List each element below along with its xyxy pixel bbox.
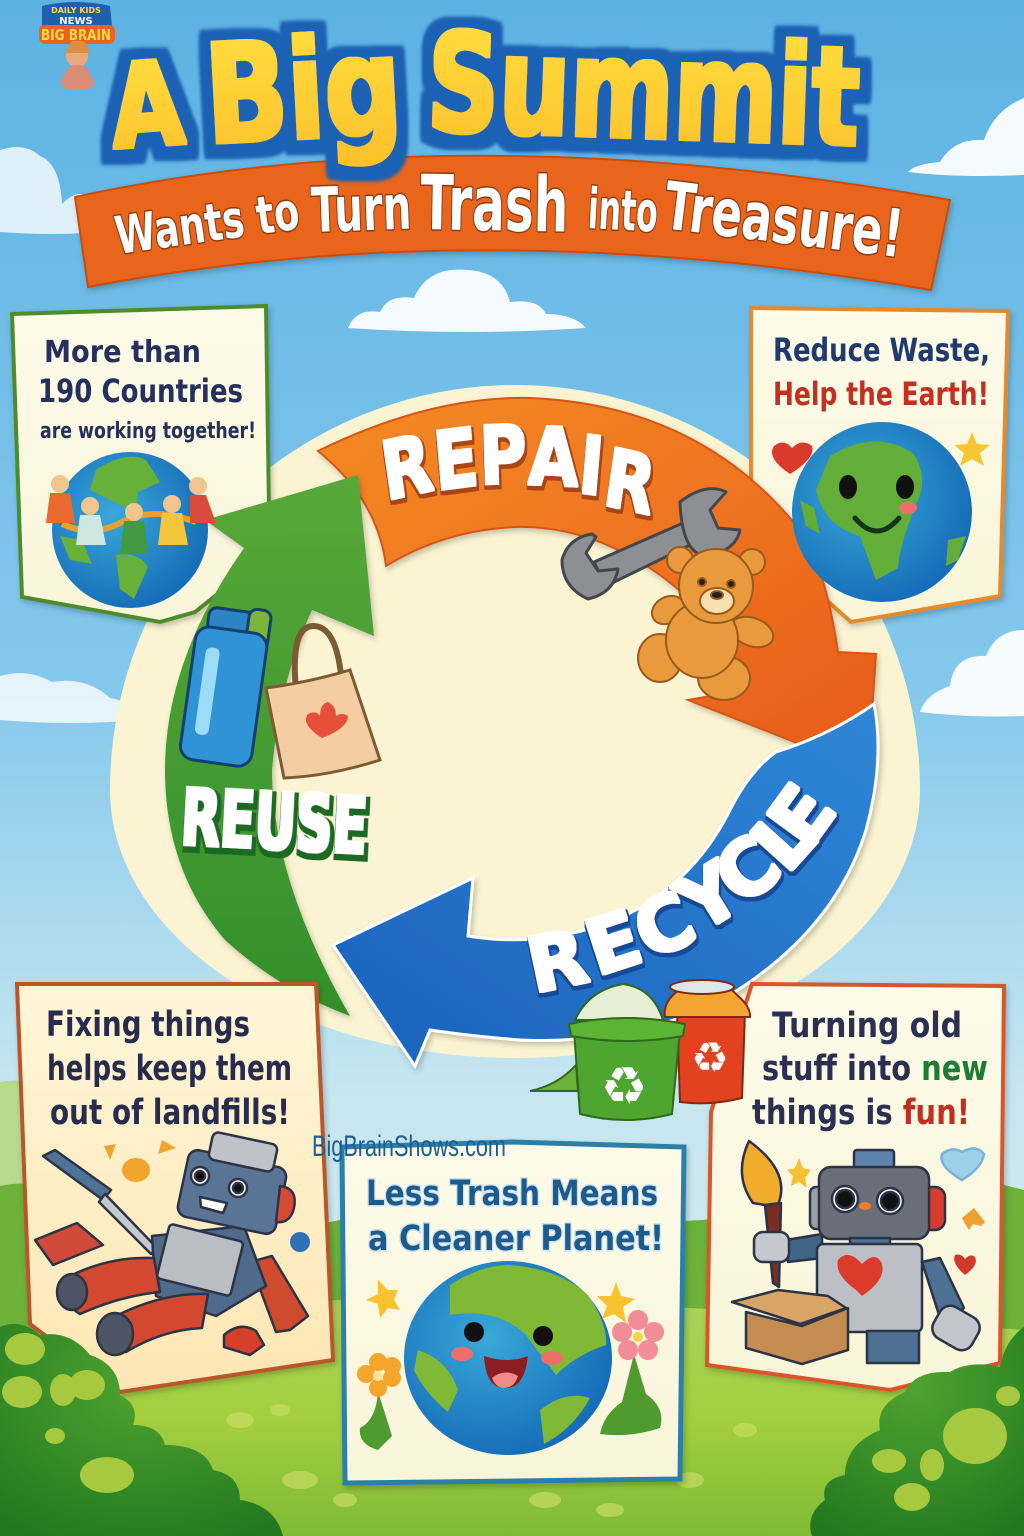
banner text: Trash xyxy=(420,158,569,250)
title: A Big Summit: Summit xyxy=(425,4,862,178)
icon: tote bag xyxy=(266,626,380,778)
ribbon banner xyxy=(75,156,950,290)
icon: smiling earth xyxy=(772,422,990,602)
icon: stars and flowers xyxy=(357,1280,664,1450)
panel: turning old stuff xyxy=(707,984,1004,1390)
panel text: More than xyxy=(44,335,201,370)
panel text: Less Trash Means xyxy=(366,1174,658,1214)
panel text xyxy=(366,1174,664,1259)
panel: cleaner planet xyxy=(342,1142,684,1483)
green bin xyxy=(530,984,685,1120)
bush: bottom left xyxy=(0,1324,283,1536)
logo: Daily Kids News Big Brain: DAILY KIDS xyxy=(51,6,101,15)
panel: countries card xyxy=(12,306,269,622)
panel text xyxy=(46,1005,292,1133)
title: A Big Summit xyxy=(107,4,862,178)
panel text xyxy=(752,1006,988,1133)
banner text: Treasure! xyxy=(660,167,908,273)
cycle arrow: orange repair xyxy=(318,398,876,771)
panel text: 190 Countries xyxy=(38,372,243,410)
panel text: things is fun! xyxy=(752,1093,970,1133)
panel: reduce waste content xyxy=(772,331,990,602)
cycle arrow: blue recycle xyxy=(333,704,878,1066)
clouds xyxy=(0,98,1024,723)
icon: wrench xyxy=(562,489,740,599)
panel text: Turning old xyxy=(772,1006,962,1046)
banner text: into xyxy=(586,177,660,246)
title: A Big Summit: A xyxy=(107,36,188,176)
icon: water bottle xyxy=(179,601,272,768)
label: repair: REPAIR xyxy=(376,408,661,534)
icon: broken robot xyxy=(35,1131,308,1355)
panel text: are working together! xyxy=(40,419,256,444)
red can: ♻ xyxy=(691,1033,729,1082)
decorative sparks xyxy=(104,1140,310,1252)
cream central circle xyxy=(110,385,920,1058)
panel text: stuff into new xyxy=(762,1049,988,1089)
icon: globe with children xyxy=(46,452,216,608)
title: A Big Summit: Big xyxy=(201,7,405,176)
label: recycle: RECYCLE xyxy=(519,768,853,1011)
logo: Daily Kids News Big Brain: NEWS xyxy=(59,16,93,27)
panel: countries content xyxy=(38,335,256,608)
cycle arrow: green reuse xyxy=(165,475,374,1016)
panel text: Fixing things xyxy=(46,1005,250,1045)
label: reuse: REUSE xyxy=(179,773,369,873)
watermark: BigBrainShows.com: BigBrainShows.com xyxy=(312,1130,506,1163)
logo: Daily Kids News Big Brain xyxy=(39,2,115,89)
grass hills and meadow xyxy=(0,1081,1024,1536)
logo: Daily Kids News Big Brain: BIG BRAIN xyxy=(41,26,111,44)
panel text xyxy=(38,335,256,444)
green bin: ♻ xyxy=(601,1057,647,1117)
icon: happy earth xyxy=(404,1261,612,1455)
panel: fixing things xyxy=(17,984,333,1392)
panel: reduce waste card xyxy=(751,308,1008,622)
icon: friendly robot xyxy=(732,1141,985,1364)
panel text: out of landfills! xyxy=(50,1093,290,1133)
banner text xyxy=(111,158,908,273)
panel text: a Cleaner Planet! xyxy=(368,1219,664,1259)
panel text: helps keep them xyxy=(47,1049,292,1089)
banner text: Wants to xyxy=(111,182,303,267)
icon: recycling bins xyxy=(530,980,750,1120)
banner text: Turn xyxy=(310,171,412,247)
icon: teddy bear xyxy=(638,547,777,700)
red can xyxy=(665,980,750,1103)
bush: bottom right xyxy=(810,1327,1024,1536)
